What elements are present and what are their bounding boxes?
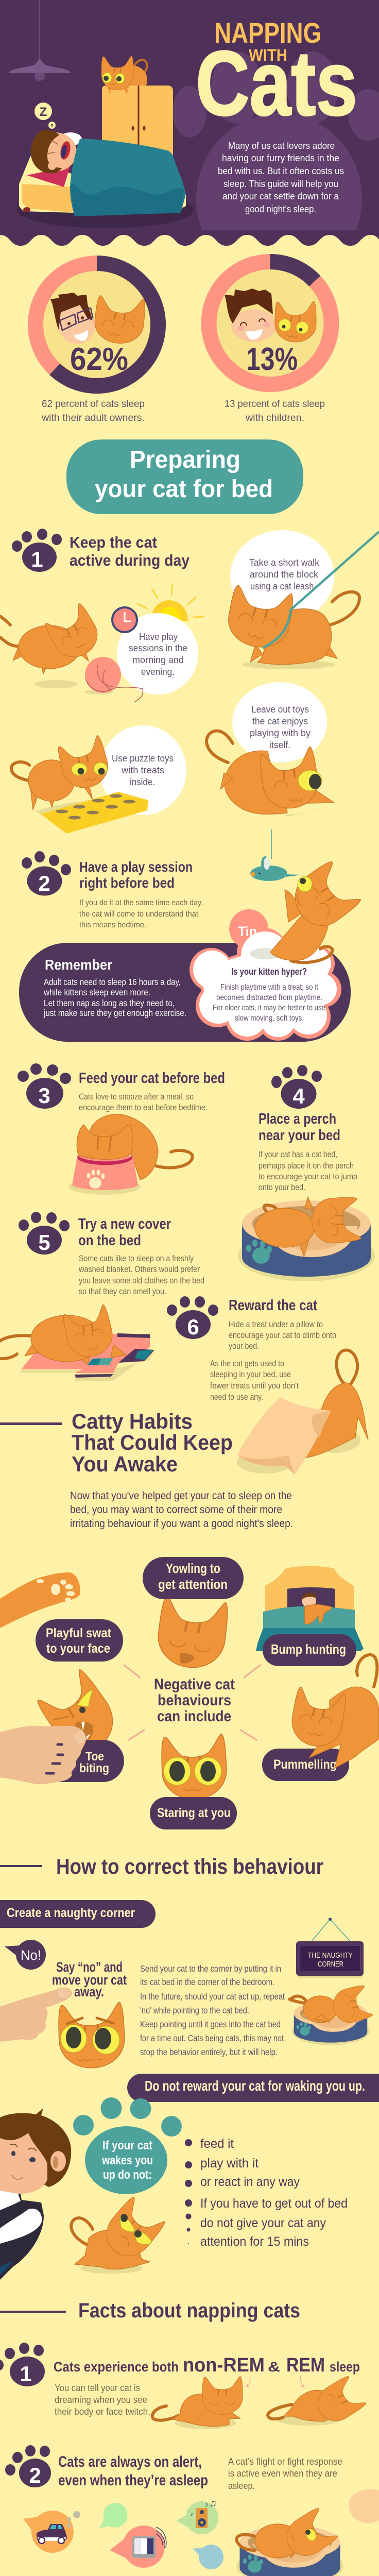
step 4 paw: 4 bbox=[292, 1084, 305, 1108]
bubble: play sessions: morning and bbox=[132, 655, 184, 665]
panel: remember: Adult cats need to sleep 16 hours a day, bbox=[44, 977, 181, 987]
step 4 text: near your bed bbox=[259, 1127, 340, 1144]
bubble: puzzle toys: Use puzzle toys bbox=[112, 753, 174, 764]
pill: yowling: Yowling to bbox=[166, 1561, 220, 1576]
pill: toe biting: biting bbox=[79, 1761, 109, 1775]
mouse toy bbox=[250, 829, 302, 881]
fact 1 heading: non-REM bbox=[183, 2354, 265, 2376]
cat yowling bbox=[154, 1595, 230, 1671]
arrow: to non-REM cat bbox=[246, 2376, 250, 2387]
intro paragraph: bed with us. But it often costs us bbox=[218, 165, 344, 176]
behaviour centre label bbox=[154, 1676, 235, 1725]
pill: playful swat: to your face bbox=[46, 1641, 110, 1656]
intro paragraph: sleep. This guide will help you bbox=[223, 178, 338, 189]
icon: tv bbox=[132, 2536, 156, 2558]
fact 1 heading: & bbox=[268, 2359, 280, 2375]
cat under pillow bbox=[237, 1350, 368, 1475]
cat looking up bbox=[71, 2195, 167, 2274]
puzzle toy bbox=[41, 792, 148, 834]
icon: boy bbox=[225, 289, 279, 342]
tip cloud: Is your kitten hyper? bbox=[231, 967, 307, 977]
do-not list bbox=[185, 2137, 348, 2249]
fact 1 body bbox=[55, 2383, 150, 2417]
background paw bbox=[173, 52, 379, 230]
panel: remember: Let them nap as long as they need to, bbox=[44, 998, 175, 1008]
bubble: play sessions: Have play bbox=[139, 632, 178, 642]
teal paw callout: If your cat bbox=[102, 2139, 152, 2153]
bubble: music noise: ♪ bbox=[190, 2510, 194, 2518]
cat biting toe bbox=[34, 1668, 125, 1761]
cat pummelling bbox=[288, 1655, 379, 1768]
bubble: music noise: ♫ bbox=[209, 2498, 217, 2509]
step 1 heading: Keep the cat bbox=[70, 533, 157, 551]
step 3 text: Feed your cat before bed bbox=[79, 1070, 225, 1087]
icon: speaker bbox=[196, 2508, 208, 2528]
illustration: man asleep in bed: Z bbox=[40, 105, 47, 119]
step 3 paw: 3 bbox=[38, 1083, 50, 1108]
step 1 paw: 1 bbox=[31, 547, 43, 571]
step 6 text: your bed. bbox=[229, 1342, 259, 1351]
speech bubble: no: No! bbox=[21, 1947, 41, 1963]
step 5 text: on the bed bbox=[78, 1232, 141, 1249]
step 6 text: As the cat gets used to bbox=[210, 1359, 284, 1368]
cat on leash bbox=[225, 532, 379, 669]
pill: bump hunting: Bump hunting bbox=[271, 1641, 346, 1657]
icon: clock bbox=[112, 607, 137, 632]
bubble: puzzle toys: with treats bbox=[121, 765, 164, 775]
pill: yowling bbox=[143, 1557, 244, 1599]
fact 1 body: You can tell your cat is bbox=[55, 2383, 140, 2393]
teal paw callout: wakes you bbox=[101, 2154, 153, 2167]
fact 2 heading bbox=[58, 2453, 208, 2489]
caption: adult owners bbox=[41, 399, 145, 423]
behaviour centre label: behaviours bbox=[158, 1692, 231, 1709]
icon: ball of yarn bbox=[84, 657, 143, 702]
section heading: catty habits: You Awake bbox=[72, 1452, 178, 1476]
pill: bump hunting bbox=[263, 1634, 356, 1666]
teal paw callout bbox=[73, 2097, 182, 2194]
bubble: green bbox=[99, 2503, 128, 2529]
header panel bbox=[0, 0, 379, 246]
bubble: tv noise bbox=[110, 2526, 166, 2568]
step 5 paw: 5 bbox=[38, 1230, 50, 1255]
step 6 text bbox=[210, 1297, 336, 1402]
step 2 text: right before bed bbox=[79, 875, 175, 891]
icon: car bbox=[37, 2524, 67, 2544]
tip cloud: slow moving, soft toys. bbox=[235, 1014, 304, 1023]
step 5 text bbox=[78, 1216, 204, 1296]
bubble: short walk bbox=[230, 530, 334, 622]
bubble: short walk: around the block bbox=[250, 569, 319, 580]
naughty corner paragraph: Keep pointing until it goes into the cat bed bbox=[140, 2019, 281, 2029]
step 6 text: Hide a treat under a pillow to bbox=[229, 1320, 323, 1329]
cat jumping bbox=[270, 859, 363, 962]
naughty corner paragraph bbox=[140, 1963, 285, 2057]
bubble: leave out toys: Leave out toys bbox=[251, 704, 309, 715]
lamp bbox=[9, 0, 71, 81]
man thinking bbox=[0, 2108, 71, 2280]
arrow: to REM cat bbox=[300, 2376, 304, 2387]
do-not list: If you have to get out of bed bbox=[200, 2196, 348, 2211]
step 4 text: perhaps place it on the perch bbox=[259, 1161, 354, 1171]
caption: children: 13 percent of cats sleep bbox=[225, 399, 325, 410]
section heading: facts about napping cats: Facts about napping cats bbox=[78, 2299, 300, 2322]
section banner: preparing your cat for bed: Preparing bbox=[130, 446, 240, 473]
heading: say no: away. bbox=[74, 1984, 104, 1999]
naughty corner paragraph: In the future, should your cat act up, repeat bbox=[140, 1991, 285, 2002]
sign: the naughty corner: THE NAUGHTY bbox=[308, 1951, 353, 1960]
behaviour centre label: Negative cat bbox=[154, 1676, 235, 1693]
bubble: music noise: ♪ bbox=[204, 2500, 208, 2509]
bubble: play sessions: evening. bbox=[141, 667, 175, 677]
pill: toe biting bbox=[58, 1740, 124, 1782]
bubble: leave out toys: playing with by bbox=[250, 728, 311, 738]
step 3 text: encourage them to eat before bedtime. bbox=[79, 1103, 208, 1112]
step 5 text: Some cats like to sleep on a freshly bbox=[79, 1254, 194, 1263]
habits intro paragraph: irritating behaviour if you want a good night's sleep. bbox=[70, 1518, 293, 1530]
bubble: blue bbox=[193, 2545, 223, 2569]
panel: remember: Remember bbox=[45, 957, 112, 973]
pill: yowling: get attention bbox=[158, 1577, 228, 1592]
non-REM cat bbox=[152, 2376, 243, 2429]
step 1 paw bbox=[12, 529, 62, 572]
heading: say no: move your cat bbox=[52, 1972, 127, 1988]
foot bbox=[0, 1726, 86, 1784]
step 2 paw bbox=[22, 851, 71, 895]
percent value: 13% bbox=[246, 342, 298, 377]
do-not list: or react in any way bbox=[200, 2175, 300, 2189]
fact 2 heading: even when they’re asleep bbox=[58, 2472, 208, 2489]
bubble: play sessions bbox=[117, 613, 198, 694]
section heading: facts about napping cats bbox=[0, 2299, 300, 2322]
teal paw callout: up do not: bbox=[103, 2168, 152, 2182]
step 4 text: to encourage your cat to jump bbox=[259, 1172, 357, 1181]
illustration: man asleep in bed: z bbox=[50, 123, 54, 129]
bubble: play sessions: sessions in the bbox=[129, 643, 187, 653]
bed with bump bbox=[256, 1566, 364, 1651]
step 4 text: Place a perch bbox=[259, 1111, 336, 1127]
pill: create a naughty corner bbox=[0, 1900, 156, 1928]
step 5 text: Try a new cover bbox=[78, 1216, 171, 1232]
fact 2 body bbox=[228, 2456, 342, 2491]
panel: remember bbox=[19, 943, 351, 1042]
sign: the naughty corner: CORNER bbox=[318, 1960, 343, 1969]
bubble: puzzle toys: inside. bbox=[130, 777, 155, 787]
fact 1 body: dreaming when you see bbox=[55, 2395, 147, 2405]
cat with puzzle toy bbox=[11, 735, 148, 834]
fact 2 body: A cat’s flight or fight response bbox=[228, 2456, 342, 2467]
step 6 text: fewer treats until you don't bbox=[210, 1381, 299, 1391]
step 6 text: sleeping in your bed, use bbox=[210, 1370, 291, 1379]
sign: the naughty corner bbox=[296, 1918, 364, 1978]
naughty corner paragraph: Send your cat to the corner by putting it in bbox=[140, 1963, 281, 1974]
step 6 paw: 6 bbox=[187, 1315, 199, 1339]
illustration: cat on wardrobe bbox=[101, 56, 173, 160]
pill: pummelling bbox=[262, 1749, 349, 1781]
step 3 paw bbox=[18, 1063, 71, 1109]
connector lines bbox=[124, 1665, 260, 1740]
pill: pummelling: Pummelling bbox=[273, 1757, 337, 1772]
fact 1 heading: Cats experience both bbox=[54, 2359, 179, 2375]
pill: toe biting: Toe bbox=[85, 1750, 104, 1764]
step 6 text: encourage your cat to climb onto bbox=[229, 1331, 336, 1340]
bubble: short walk: Take a short walk bbox=[249, 557, 320, 568]
step 4 paw bbox=[271, 1065, 322, 1109]
tip cloud: Finish playtime with a treat, so it bbox=[220, 983, 319, 992]
do-not list: attention for 15 mins bbox=[200, 2234, 309, 2249]
step 6 text: Reward the cat bbox=[229, 1297, 317, 1314]
step 4 text: onto your bed. bbox=[259, 1183, 305, 1192]
step 2 text: this means bedtime. bbox=[79, 921, 146, 929]
cat crouching bbox=[206, 731, 334, 817]
icon: sun bbox=[137, 585, 203, 621]
title: WITH bbox=[249, 46, 287, 64]
section heading: catty habits bbox=[0, 1409, 233, 1476]
naughty corner paragraph: its cat bed in the corner of the bedroom. bbox=[140, 1977, 274, 1987]
naughty corner paragraph: for a time out. Cats being cats, this may not bbox=[140, 2033, 284, 2043]
step 2 text: Have a play session bbox=[79, 859, 193, 875]
pill: staring at you bbox=[150, 1797, 237, 1829]
bubble: music noise bbox=[176, 2498, 218, 2534]
caption: children bbox=[225, 399, 325, 423]
intro paragraph: and your cat settle down for a bbox=[222, 191, 339, 201]
fact 1 heading: sleep bbox=[330, 2359, 360, 2375]
step 2 paw: 2 bbox=[38, 871, 50, 895]
REM cat bbox=[268, 2374, 367, 2428]
step 6 paw bbox=[167, 1296, 218, 1339]
fact 2 heading: Cats are always on alert, bbox=[58, 2453, 202, 2470]
tip cloud: becomes distracted from playtime. bbox=[216, 993, 322, 1002]
do-not list: feed it bbox=[200, 2137, 234, 2151]
step 5 text: so that they can smell you. bbox=[79, 1287, 166, 1296]
habits intro paragraph bbox=[70, 1490, 293, 1530]
pill: playful swat bbox=[36, 1619, 123, 1662]
section heading: how to correct this behaviour: How to correct this behaviour bbox=[56, 1854, 323, 1878]
speech bubble: no bbox=[5, 1940, 46, 1970]
fact 2 paw bbox=[5, 2445, 51, 2487]
step 3 text bbox=[79, 1070, 225, 1112]
step 5 text: you leave some old clothes on the bed bbox=[79, 1276, 204, 1285]
section banner: preparing your cat for bed: your cat for bed bbox=[95, 476, 273, 503]
fact 1 heading bbox=[54, 2354, 360, 2376]
cat in naughty corner bed bbox=[289, 1984, 373, 2045]
bubble: leave out toys bbox=[232, 682, 327, 762]
pill: playful swat: Playful swat bbox=[46, 1626, 112, 1640]
cat asleep in blue bed bbox=[238, 1196, 375, 1281]
caption: adult owners: 62 percent of cats sleep bbox=[42, 399, 145, 410]
icon: smiling cat bbox=[93, 294, 146, 346]
tip cloud: For older cats, it may be better to use bbox=[213, 1004, 325, 1012]
intro paragraph: good night's sleep. bbox=[245, 204, 316, 214]
step 5 paw bbox=[19, 1212, 70, 1255]
step 6 text: need to use any. bbox=[210, 1393, 263, 1402]
bubble: puzzle toys bbox=[100, 725, 186, 815]
cat eating from bowl bbox=[68, 1114, 193, 1195]
step 2 text: the cat will come to understand that bbox=[79, 910, 199, 919]
caption: children: with children. bbox=[245, 413, 304, 423]
step 1 heading: active during day bbox=[70, 551, 190, 569]
section heading: catty habits: That Could Keep bbox=[72, 1430, 233, 1454]
step 1 heading bbox=[70, 533, 190, 569]
step 4 text: If your cat has a cat bed, bbox=[259, 1150, 337, 1159]
fact 2 paw: 2 bbox=[29, 2463, 41, 2487]
intro paragraph bbox=[218, 140, 344, 214]
habits intro paragraph: Now that you've helped get your cat to sleep on the bbox=[70, 1490, 292, 1502]
donut chart: 13 percent bbox=[209, 262, 332, 384]
step 2 text bbox=[79, 859, 203, 929]
fact 1 paw: 1 bbox=[20, 2362, 32, 2386]
cat paw swat bbox=[0, 1572, 80, 1628]
step 3 text: Cats love to snooze after a meal, so bbox=[79, 1092, 194, 1101]
habits intro paragraph: bed, you may want to correct some of their more bbox=[70, 1504, 282, 1516]
fact 2 body: asleep. bbox=[228, 2481, 255, 2491]
alert cat in bed bbox=[236, 2506, 343, 2576]
heading: say no: Say “no” and bbox=[56, 1959, 123, 1975]
intro paragraph: Many of us cat lovers adore bbox=[228, 140, 335, 151]
donut chart: 62 percent bbox=[36, 263, 158, 386]
percent value: 62% bbox=[70, 342, 128, 377]
do-not list: do not give your cat any bbox=[200, 2216, 326, 2230]
cat on blanket bbox=[0, 1304, 154, 1381]
title: NAPPING bbox=[214, 16, 321, 49]
naughty corner paragraph: stop the behavior entirely, but it will help. bbox=[140, 2047, 278, 2057]
intro paragraph: having our furry friends in the bbox=[222, 152, 339, 163]
step 2 text: If you do it at the same time each day, bbox=[79, 899, 203, 907]
caption: adult owners: with their adult owners. bbox=[41, 413, 145, 423]
panel: remember: while kittens sleep even more. bbox=[43, 987, 150, 997]
icon: cat with yellow eyes bbox=[275, 301, 316, 342]
pointing hand bbox=[0, 1988, 72, 2042]
fact 1 heading: REM bbox=[286, 2354, 325, 2376]
cat playing with yarn bbox=[0, 602, 105, 688]
pill: staring at you: Staring at you bbox=[157, 1806, 231, 1820]
bubble: leave out toys: the cat enjoys bbox=[252, 716, 308, 726]
worried cat bbox=[58, 2002, 126, 2069]
pill: create a naughty corner: Create a naughty corner bbox=[7, 1906, 135, 1920]
section heading: catty habits: Catty Habits bbox=[72, 1409, 193, 1433]
step 4 text bbox=[259, 1111, 357, 1192]
icon: man with glasses bbox=[50, 293, 100, 348]
illustration: man asleep in bed bbox=[17, 103, 194, 228]
step 5 text: washed blanket. Others would prefer bbox=[78, 1265, 200, 1274]
do-not list: play with it bbox=[200, 2156, 259, 2171]
tip cloud: Tip bbox=[238, 924, 257, 939]
section banner: preparing your cat for bed bbox=[66, 439, 303, 514]
fact 2 body: is active even when they are bbox=[228, 2468, 337, 2479]
heading: say no bbox=[52, 1959, 127, 1999]
panel: remember: just make sure they get enough exercise. bbox=[43, 1008, 186, 1018]
decorative peach bubble bbox=[349, 2489, 379, 2523]
behaviour centre label: can include bbox=[157, 1708, 231, 1725]
pill: do not reward bbox=[127, 2074, 379, 2102]
fact 1 body: their body or face twitch. bbox=[55, 2406, 150, 2417]
fact 1 paw bbox=[0, 2343, 45, 2386]
cat staring bbox=[161, 1734, 228, 1801]
naughty corner paragraph: 'no' while pointing to the cat bed. bbox=[140, 2005, 249, 2015]
bubble: leave out toys: itself. bbox=[269, 740, 290, 750]
bubble: short walk: using a cat leash. bbox=[250, 581, 316, 591]
tip cloud bbox=[190, 909, 341, 1041]
bubble: car noise bbox=[23, 2511, 80, 2553]
